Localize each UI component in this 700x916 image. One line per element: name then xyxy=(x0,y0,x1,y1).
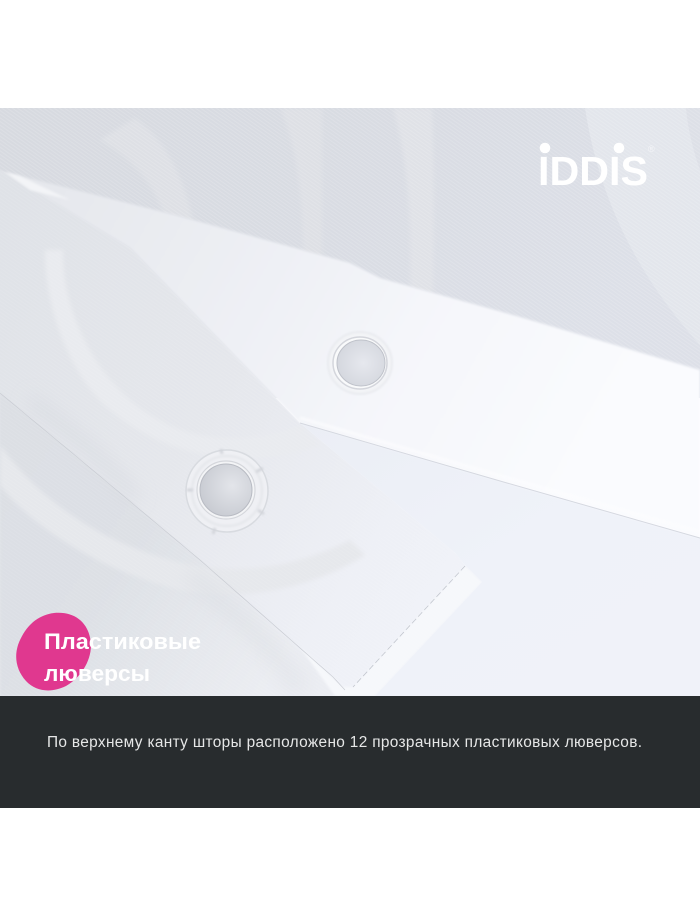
caption text: По верхнему канту шторы расположено 12 прозрачных пластиковых люверсов. xyxy=(47,734,642,751)
upper curtain layer xyxy=(0,108,700,398)
icon: upper grommet xyxy=(332,336,392,394)
logo: IDDIS: ® xyxy=(648,144,655,154)
heading: plastic grommets: люверсы xyxy=(44,661,150,686)
icon: pink blob xyxy=(16,613,91,690)
lower-left curtain layer xyxy=(0,160,500,700)
icon: lower grommet xyxy=(186,449,268,534)
logo: IDDIS: IDDIS xyxy=(538,148,648,194)
panel: dark caption bar xyxy=(0,696,700,808)
infographic canvas xyxy=(0,108,700,808)
panel: curtain photo xyxy=(0,108,700,700)
lower-right curtain layer xyxy=(300,423,700,696)
folded top hem xyxy=(0,170,700,538)
heading: plastic grommets: Пластиковые xyxy=(44,629,201,654)
